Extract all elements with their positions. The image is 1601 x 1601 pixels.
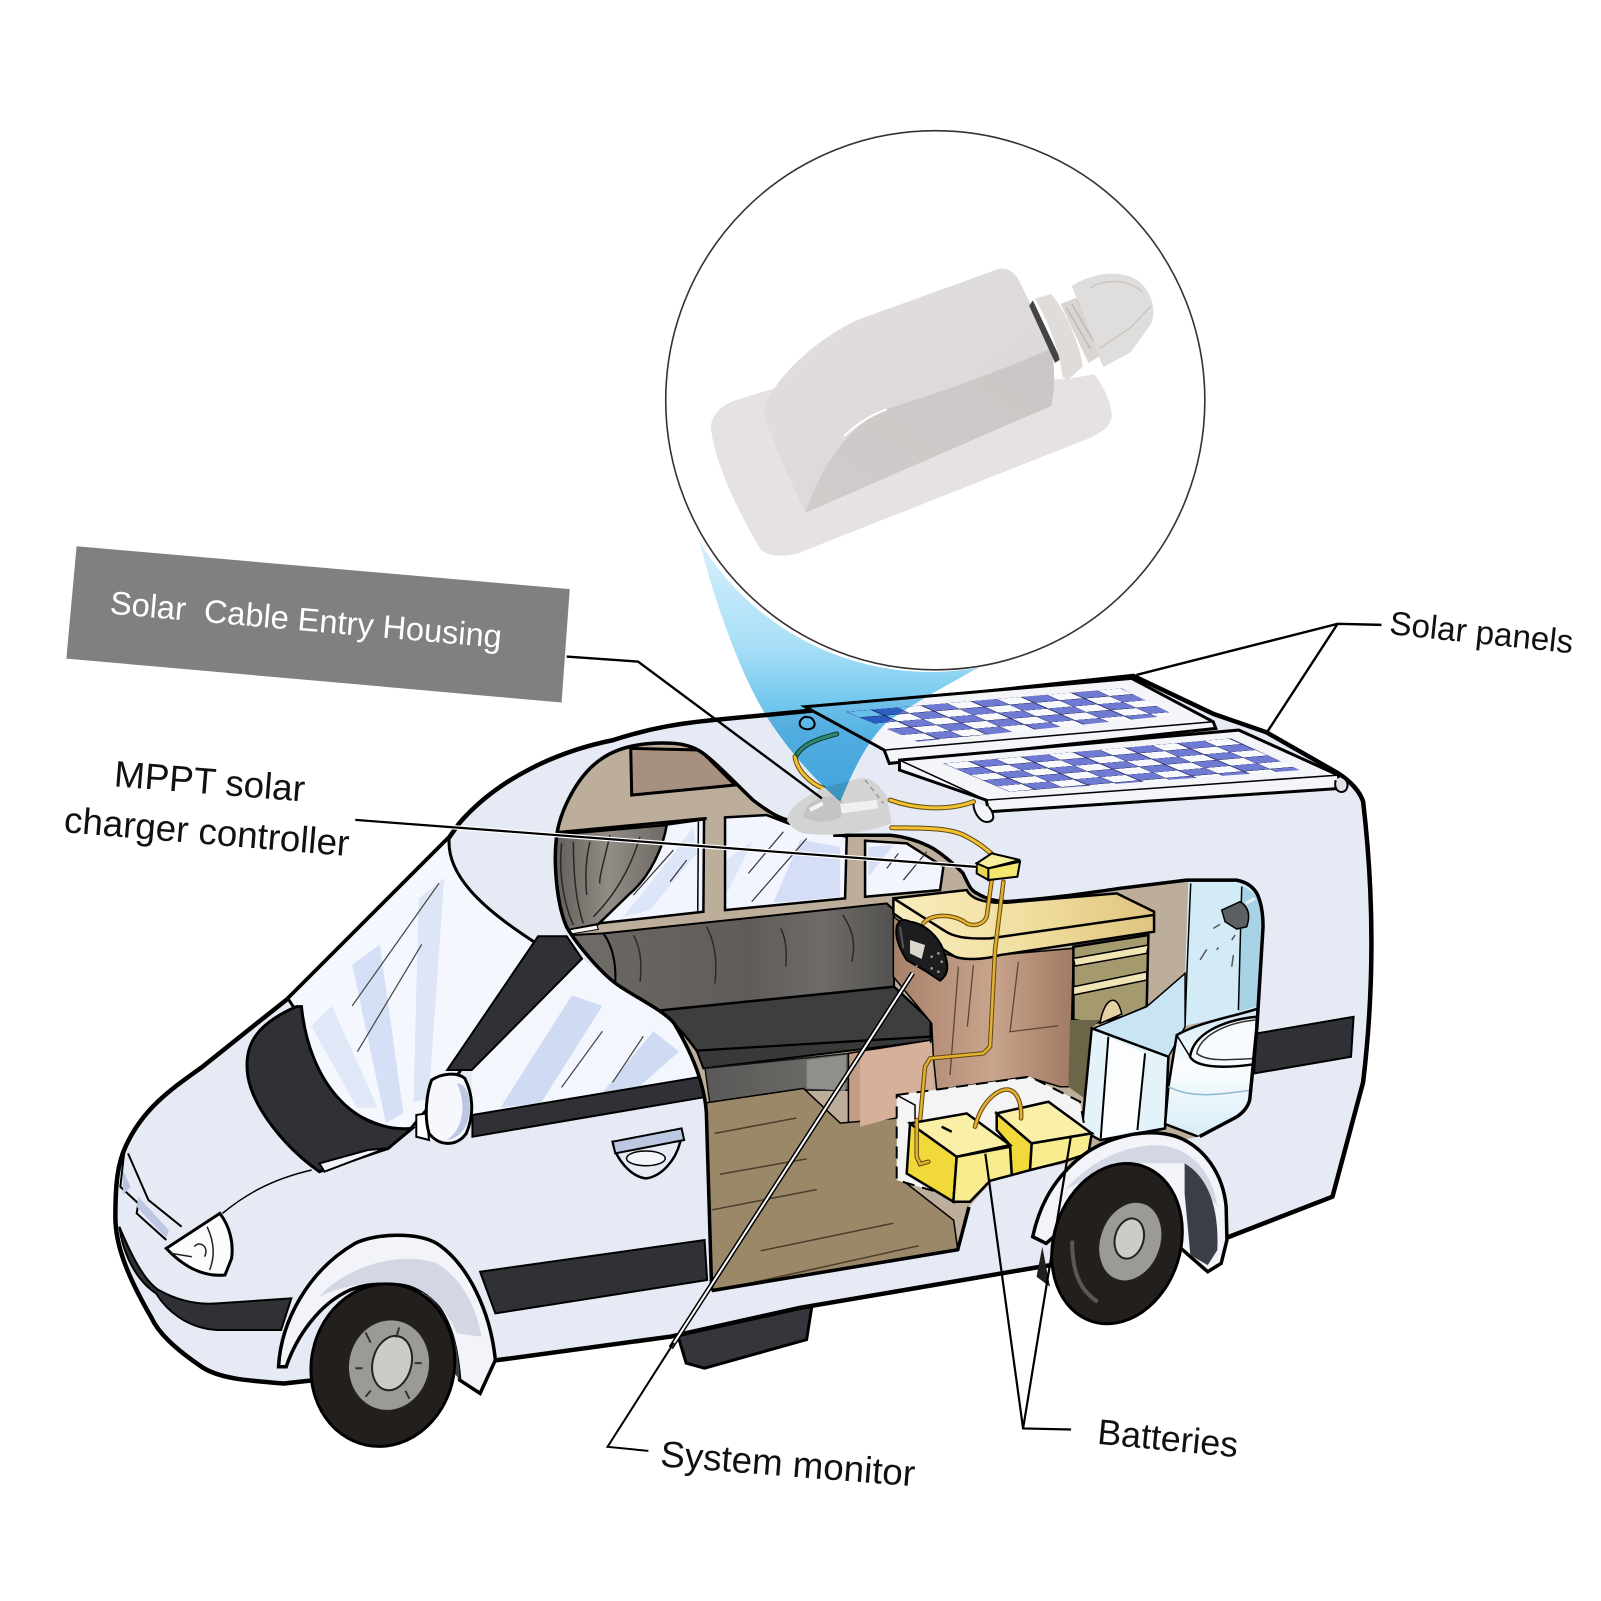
seat cushion front: [697, 1037, 931, 1068]
lower pink cabinet: [860, 1043, 933, 1127]
interior outline: [555, 743, 1263, 1291]
couch end: [573, 932, 614, 980]
battery 1: [907, 1113, 1012, 1202]
battery wires: [917, 1090, 1021, 1164]
rear wheel arch: [1033, 1133, 1227, 1287]
solar panels: [800, 678, 1348, 822]
blue projection beam: [699, 541, 978, 802]
pink panel: [848, 1040, 931, 1123]
beige back wall: [1120, 882, 1190, 1007]
leader: cable housing: [567, 657, 822, 798]
couch seat: [657, 987, 931, 1051]
label: MPPT solar charger controller: MPPT solar: [113, 753, 307, 810]
grille: [120, 1150, 182, 1240]
magnifier circle: [666, 131, 1205, 670]
leader: solar panels: [1136, 624, 1381, 732]
dark cowl: [247, 1007, 412, 1172]
counter: [893, 890, 1154, 959]
window 1: [598, 819, 704, 923]
green and yellow cables: [795, 734, 995, 857]
dome shaded side: [805, 349, 1054, 513]
counter and wiring group: [893, 880, 1154, 1202]
lower stripe: [480, 1240, 707, 1313]
cutaway interior: [541, 725, 1276, 1307]
shower wall: [1185, 882, 1256, 1026]
van body: [115, 676, 1372, 1384]
bathroom cabinet: [1082, 1028, 1168, 1140]
bumper stripe: [119, 1227, 291, 1330]
floor: [707, 1088, 958, 1291]
under seat: [705, 1053, 848, 1105]
label: system monitor: System monitor: [659, 1433, 917, 1494]
leader: batteries: [985, 1135, 1071, 1429]
couch back: [603, 903, 894, 1011]
housing dome: [763, 269, 1054, 513]
cable housing on roof: [787, 778, 892, 835]
panel 1: [800, 678, 1216, 763]
label: solar panels: Solar panels: [1388, 605, 1575, 661]
belt line: [472, 1077, 707, 1137]
front body details: [119, 1007, 707, 1393]
side door window: [472, 959, 702, 1115]
hood line: [222, 1170, 312, 1213]
left interior: lounge: [550, 748, 943, 1123]
cables inside: [917, 880, 1003, 1164]
panel 2: [899, 730, 1348, 822]
wing mirror: [416, 1074, 472, 1143]
battery 2: [997, 1102, 1092, 1175]
leader: MPPT controller: [355, 820, 976, 867]
leader: system monitor: [608, 973, 913, 1451]
wiper: [319, 1148, 386, 1172]
toilet: [1165, 1008, 1258, 1137]
A pillar: [447, 936, 582, 1070]
window top rail: [558, 818, 707, 832]
front wheel arch: [279, 1235, 495, 1393]
battery bay: [897, 1077, 1085, 1202]
windshield: [288, 837, 538, 1131]
label: MPPT solar charger controller: charger controller: [63, 799, 351, 864]
label: MPPT solar charger controller: [63, 753, 351, 864]
housing base plate: [711, 374, 1112, 556]
door handle: [613, 1128, 684, 1178]
wall picture: [631, 748, 735, 795]
gray label box: [66, 546, 570, 702]
roof wiring and housing: [787, 734, 995, 857]
front wheel: [296, 1270, 470, 1460]
window 2: [725, 815, 847, 910]
product: cable entry housing: [711, 269, 1153, 556]
window 3: [865, 841, 943, 897]
dome highlight: [844, 409, 887, 436]
drawers: [1068, 935, 1148, 1100]
headlight: [166, 1213, 232, 1275]
shower head: [1200, 898, 1255, 967]
curtain: [550, 825, 667, 930]
rear stripe: [1254, 1017, 1354, 1073]
MPPT controller: [977, 853, 1020, 880]
side step: [674, 1307, 812, 1368]
curtain tie: [570, 926, 599, 934]
system monitor device: [896, 920, 947, 981]
label: solar cable entry housing: Solar Cable Entry Housing: [109, 584, 503, 655]
cable gland: [1029, 274, 1153, 380]
right interior: kitchen and bath: [860, 880, 1265, 1202]
rear tire: [1032, 1146, 1202, 1341]
label: batteries: Batteries: [1096, 1412, 1240, 1465]
brown cabinet: [893, 917, 1073, 1090]
